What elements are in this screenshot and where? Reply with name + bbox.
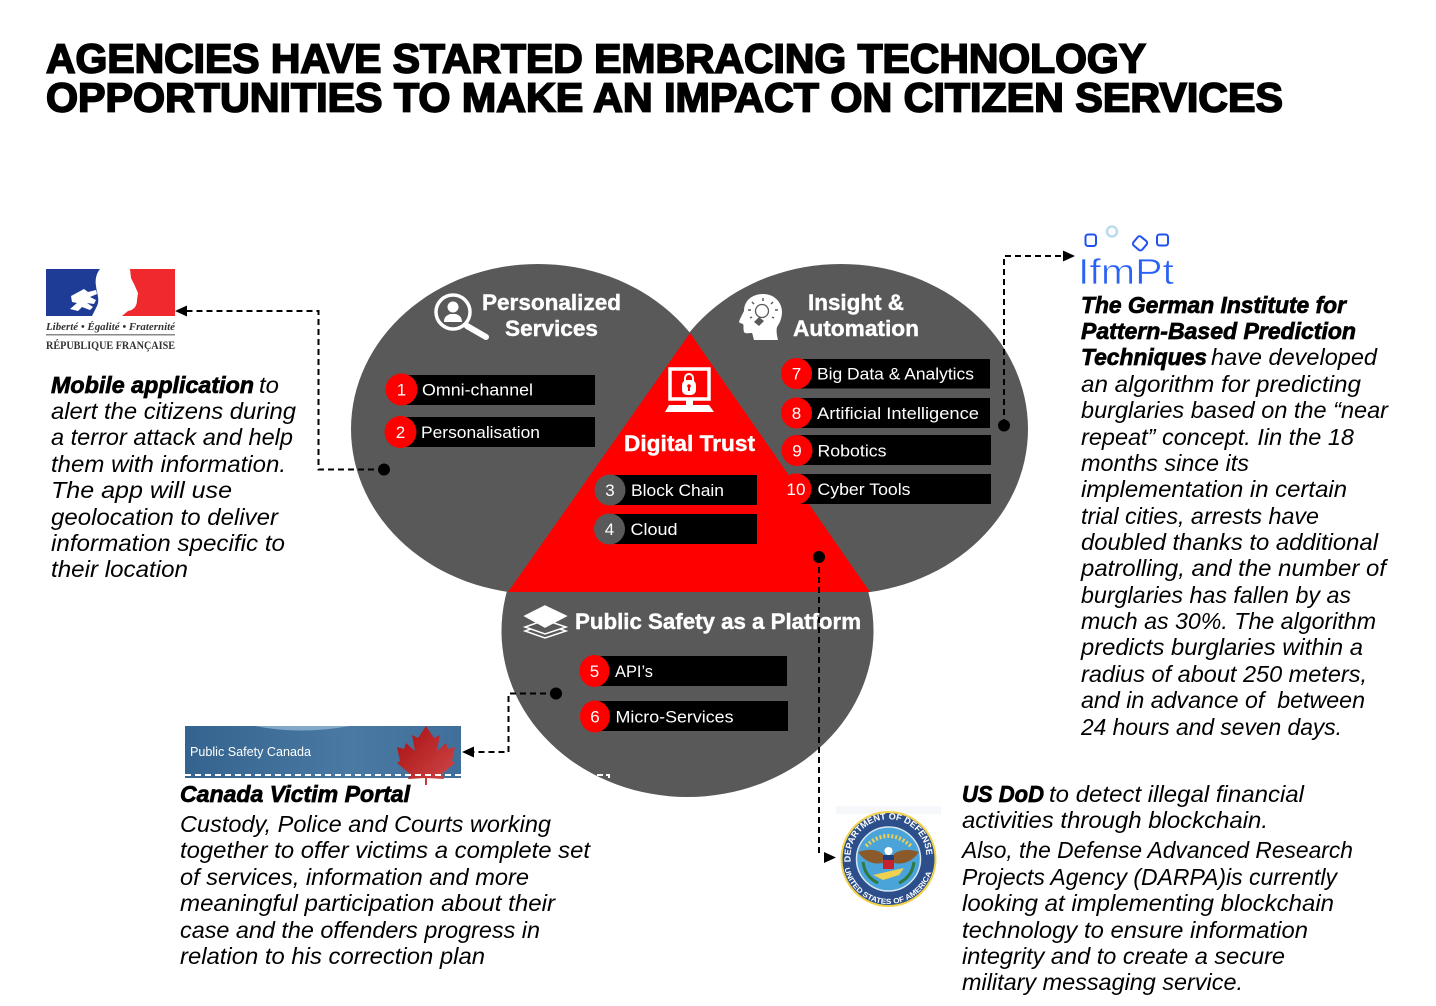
arrow: insight to IfmPt logo [998, 250, 1075, 432]
text block: US DoD: integrity and to create a secure [962, 943, 1285, 969]
item 1: omni-channel: 1 [397, 380, 406, 400]
icon: magnifier with person [436, 295, 486, 337]
logo: french republic: Liberté • Égalité • Fraternité [45, 321, 176, 333]
item 7: big data and analytics [781, 358, 990, 389]
text block: mobile application: information specific to [51, 530, 285, 556]
item 4: cloud: 4 [605, 520, 614, 539]
text block: canada victim portal: case and the offenders progress in [180, 917, 540, 943]
text block: mobile application: their location [51, 556, 188, 582]
item 5: APIs [580, 655, 787, 687]
heading: personalized services: Services [505, 316, 598, 341]
text block: US DoD: Projects Agency (DARPA)is currently [962, 864, 1338, 890]
text block: canada victim portal: Canada Victim Portal [180, 781, 411, 807]
panel: personalized services circle [351, 264, 725, 594]
logo: department of defense seal: DEPARTMENT OF DEFENSE [844, 813, 933, 862]
item 3: block chain: Block Chain [631, 481, 724, 500]
text block: german institute: an algorithm for predicting [1081, 371, 1361, 397]
icon: head with light bulb [739, 294, 782, 340]
arrow: digital trust to DoD seal [813, 551, 836, 863]
text block: german institute [1080, 292, 1389, 740]
logo: department of defense seal [836, 806, 941, 907]
heading: public safety as a platform: Public Safety as a Platform [575, 609, 861, 634]
title: OPPORTUNITIES TO MAKE AN IMPACT ON CITIZEN SERVICES [46, 74, 1283, 120]
item 8: artificial intelligence [781, 398, 990, 428]
logo: IfmPt: IfmPt [1078, 251, 1174, 292]
item 9: robotics: Robotics [818, 442, 886, 460]
text block: US DoD [960, 781, 1353, 995]
text block: german institute: repeat” concept. Iin the 18 [1081, 424, 1354, 450]
text block: US DoD: US DoD [962, 781, 1044, 807]
item 10: cyber tools [780, 474, 991, 504]
item 1: omni-channel [386, 374, 595, 406]
text block: US DoD: looking at implementing blockchain [962, 890, 1334, 916]
heading: personalized services: Personalized [482, 290, 621, 315]
text block: mobile application: alert the citizens during [51, 398, 296, 424]
text block: german institute: 24 hours and seven days. [1080, 714, 1342, 740]
logo: french republic [45, 269, 176, 352]
text block: mobile application: Mobile application [51, 372, 254, 398]
arrow: personalized services to french logo [175, 306, 390, 476]
text block: mobile application: them with information. [51, 451, 286, 477]
logo: public safety canada banner [185, 726, 461, 785]
heading: insight and automation: Automation [793, 316, 919, 341]
title: AGENCIES HAVE STARTED EMBRACING TECHNOLOGY [46, 36, 1146, 82]
text block: german institute: and in advance of between [1081, 687, 1365, 713]
item 9: robotics [782, 435, 991, 466]
text block: US DoD: Also, the Defense Advanced Research [960, 837, 1353, 863]
text block: canada victim portal [180, 781, 592, 969]
text block: german institute: implementation in certain [1081, 476, 1347, 502]
title [46, 36, 1283, 120]
text block: canada victim portal: together to offer victims a complete set [180, 837, 592, 863]
text block: US DoD: technology to ensure information [962, 917, 1308, 943]
icon: layers [525, 606, 566, 638]
text block: german institute: patrolling, and the number of [1080, 555, 1389, 581]
arrow: public safety to canada banner [462, 688, 562, 758]
text block: canada victim portal: of services, information and more [180, 864, 529, 890]
heading: digital trust: Digital Trust [624, 431, 756, 456]
heading: insight and automation: Insight & [808, 290, 904, 315]
item 10: cyber tools: 10 [787, 480, 805, 499]
item 7: big data and analytics: Big Data & Analytics [817, 364, 974, 384]
item 8: artificial intelligence: Artificial Intelligence [817, 404, 979, 423]
item 7: big data and analytics: 7 [792, 364, 801, 384]
text block: US DoD: activities through blockchain. [962, 807, 1268, 833]
text block: german institute: much as 30%. The algorithm [1081, 608, 1376, 634]
panel: public safety circle [502, 592, 874, 797]
logo: public safety canada banner: Public Safety Canada [190, 745, 311, 759]
text block: canada victim portal: relation to his correction plan [180, 943, 485, 969]
text block: german institute: burglaries based on the “near [1081, 397, 1389, 423]
text block: US DoD: to detect illegal financial [1049, 781, 1305, 807]
panel: insight and automation circle [654, 264, 1028, 594]
text block: german institute: radius of about 250 meters, [1081, 661, 1367, 687]
item 9: robotics: 9 [792, 442, 802, 460]
text block: canada victim portal: Custody, Police and Courts working [180, 811, 551, 837]
text block: german institute: Pattern-Based Prediction [1081, 318, 1356, 344]
text block: german institute: doubled thanks to additional [1081, 529, 1379, 555]
item 5: APIs: 5 [590, 662, 599, 681]
item 6: micro-services: Micro-Services [616, 708, 734, 726]
heading: insight and automation [793, 290, 919, 341]
text block: german institute: predicts burglaries within a [1080, 634, 1363, 660]
item 6: micro-services: 6 [590, 708, 600, 726]
text block: german institute: trial cities, arrests have [1081, 503, 1319, 529]
item 4: cloud: Cloud [630, 520, 678, 539]
text block: mobile application [51, 372, 296, 582]
icon: monitor with lock [665, 369, 714, 412]
white dashed rule [185, 774, 461, 776]
heading: personalized services [482, 290, 621, 341]
text block: german institute: months since its [1081, 450, 1250, 476]
text block: mobile application: a terror attack and help [51, 424, 293, 450]
text block: german institute: The German Institute for [1081, 292, 1347, 318]
item 6: micro-services [580, 700, 788, 732]
text block: US DoD: military messaging service. [962, 969, 1243, 995]
text block: german institute: have developed [1211, 344, 1378, 370]
logo: IfmPt [1078, 226, 1174, 292]
text block: canada victim portal: meaningful participation about their [180, 890, 556, 916]
text block: german institute: burglaries has fallen by as [1081, 582, 1351, 608]
item 2: personalisation [384, 416, 595, 448]
text block: mobile application: geolocation to deliver [51, 504, 279, 530]
text block: mobile application: to [259, 372, 279, 398]
item 1: omni-channel: Omni-channel [422, 380, 533, 400]
logo: department of defense seal: UNITED STATES OF AMERICA [844, 868, 932, 904]
item 5: APIs: API’s [615, 662, 653, 681]
item 2: personalisation: Personalisation [421, 423, 540, 442]
item 8: artificial intelligence: 8 [792, 404, 801, 423]
item 3: block chain [594, 474, 757, 506]
item 4: cloud [594, 514, 757, 544]
text block: german institute: Techniques [1081, 344, 1207, 370]
item 2: personalisation: 2 [396, 423, 405, 442]
panel: digital trust triangle [508, 333, 870, 592]
logo: french republic: RÉPUBLIQUE FRANÇAISE [46, 338, 175, 352]
item 3: block chain: 3 [605, 481, 615, 500]
text block: mobile application: The app will use [51, 477, 232, 503]
item 10: cyber tools: Cyber Tools [818, 480, 910, 499]
